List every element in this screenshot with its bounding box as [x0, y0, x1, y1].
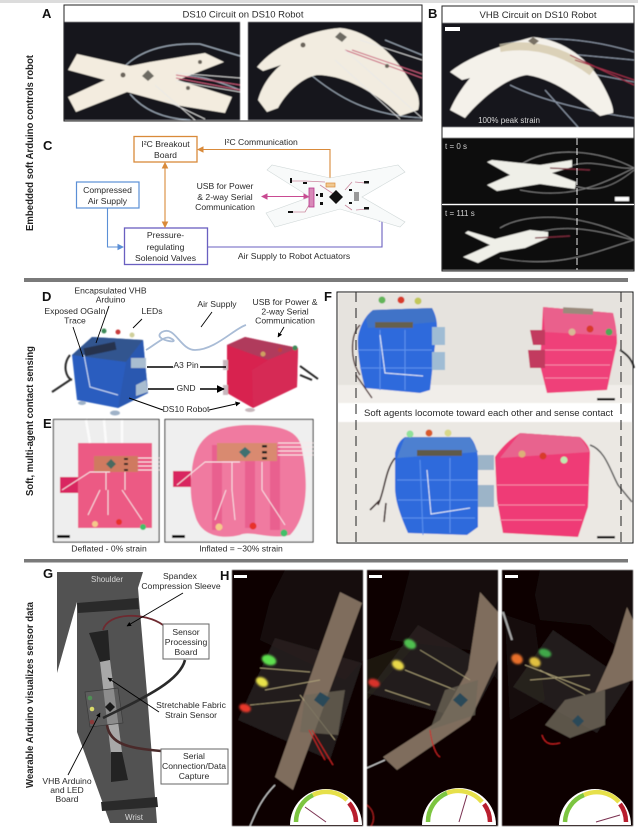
callout: strain sensor: Strain Sensor	[165, 710, 217, 720]
photo: flat robot	[64, 22, 240, 120]
red robot cube	[223, 337, 318, 412]
box: compressed air supply: Compressed	[83, 185, 132, 195]
box: pressure-regulating solenoid valves: regulating	[147, 242, 185, 252]
panel letter E: E	[43, 416, 52, 431]
arrow: air supply to robot actuators	[208, 216, 382, 247]
gauge 2	[422, 788, 496, 825]
callout: VHB Arduino	[42, 713, 100, 804]
air supply tube	[146, 325, 246, 350]
photo: t = 0 s	[442, 138, 634, 204]
callouts D: GND	[176, 383, 196, 393]
scale bar	[445, 27, 460, 31]
label: shoulder: Shoulder	[91, 575, 123, 584]
arrow: USB	[262, 196, 309, 198]
callouts D: Exposed OGaIn	[44, 306, 106, 316]
cables	[103, 616, 185, 751]
arrow: air supply to valves	[108, 208, 123, 247]
circuit diagram on robot outline	[266, 165, 405, 227]
box: serial connection: Connection/Data	[162, 761, 226, 771]
callouts D: USB for Power &	[253, 297, 318, 307]
box: sensor processing board: Board	[175, 647, 198, 657]
callouts D: A3 Pin	[173, 360, 199, 370]
box: pressure-regulating solenoid valves: Pressure-	[147, 230, 184, 240]
callouts D: Air Supply	[197, 299, 237, 309]
panel F: agents locomote and sense contact	[337, 292, 634, 543]
panel D: two soft robot cubes	[44, 286, 318, 416]
box: sensor processing board: Sensor	[172, 627, 200, 637]
panel letter A: A	[42, 6, 52, 21]
callout: VHB Arduino: VHB Arduino	[42, 776, 92, 786]
gauge 1	[290, 789, 362, 825]
box: pressure-regulating solenoid valves: Solenoid Valves	[135, 253, 196, 263]
callouts D: Encapsulated VHB	[74, 286, 147, 296]
shoulder band	[77, 598, 139, 613]
caption: 100% peak strain: 100% peak strain	[478, 116, 540, 125]
panel E: deflated and inflated agents	[54, 420, 313, 554]
photo: t = 111 s	[442, 205, 634, 270]
box: serial connection: Serial	[183, 751, 205, 761]
label: USB for power and serial	[195, 181, 255, 212]
callout: strain sensor: Stretchable Fabric	[156, 700, 227, 710]
box: compressed air supply: Air Supply	[88, 196, 128, 206]
label: air supply to robot actuators: Air Supply to Robot Actuators	[238, 251, 350, 261]
photo: agents in contact	[338, 422, 632, 542]
callout: spandex sleeve: Spandex	[163, 571, 198, 581]
label: USB for power and serial: USB for Power	[197, 181, 254, 191]
panel A: DS10 circuit on DS10 robot	[64, 5, 422, 121]
callout: spandex sleeve: Compression Sleeve	[141, 581, 221, 591]
time label t = 111 s: t = 111 s	[445, 209, 475, 218]
box: sensor processing board: Processing	[165, 637, 207, 647]
label: I2C communication: I²C Communication	[224, 137, 298, 147]
panel letter D: D	[42, 289, 51, 304]
VHB Arduino board	[85, 688, 123, 727]
panel C: system diagram	[76, 136, 405, 264]
caption: deflated: Deflated - 0% strain	[71, 544, 147, 554]
photo: bent robot	[248, 22, 422, 120]
photo: agents apart	[338, 293, 634, 403]
photo 3	[502, 570, 633, 826]
callouts D: DS10 Robot	[163, 404, 210, 414]
callout: VHB Arduino: Board	[56, 794, 79, 804]
photo: inflated	[165, 420, 313, 542]
panel letter B: B	[428, 6, 437, 21]
box: pressure-regulating solenoid valves	[124, 228, 208, 264]
box: serial connection: Capture	[179, 771, 210, 781]
callout: spandex sleeve	[127, 571, 221, 626]
panel letter C: C	[43, 138, 53, 153]
panel B: VHB circuit on DS10 robot	[442, 6, 634, 271]
callouts D: Arduino	[96, 294, 126, 304]
caption: locomote: Soft agents locomote toward each other and sense contact	[364, 408, 613, 418]
arrow: board to valves	[164, 163, 166, 227]
arrow: I2C communication	[198, 150, 330, 183]
section label: embedded soft Arduino controls robot: Embedded soft Arduino controls robot	[25, 54, 36, 231]
panel H: wearable photo sequence	[231, 569, 634, 826]
time label t = 0 s: t = 0 s	[445, 142, 467, 151]
callout: VHB Arduino: and LED	[50, 785, 84, 795]
section label: soft multi-agent contact sensing: Soft, multi-agent contact sensing	[25, 346, 36, 496]
callouts D	[44, 286, 318, 414]
box: I2C breakout board	[134, 136, 197, 162]
panel A heading: DS10 Circuit on DS10 Robot	[182, 8, 304, 20]
photo 1	[232, 570, 363, 826]
box: I2C breakout board: I²C Breakout	[141, 139, 190, 149]
strain sensor	[89, 630, 128, 782]
box: compressed air supply	[76, 182, 139, 208]
photo: 100% peak strain	[442, 23, 634, 127]
panel letter F: F	[324, 289, 332, 304]
panel letter G: G	[43, 566, 53, 581]
panel letter H: H	[220, 568, 229, 583]
wrist band	[101, 797, 158, 811]
photo 2	[367, 570, 498, 826]
panel B heading: VHB Circuit on DS10 Robot	[480, 9, 597, 20]
blue robot cube	[52, 328, 148, 416]
label: USB for power and serial: Communication	[195, 202, 255, 212]
callout: strain sensor	[108, 678, 227, 720]
box: serial connection	[161, 749, 228, 784]
caption: inflated: Inflated = ~30% strain	[199, 544, 283, 554]
box: sensor processing board	[163, 624, 209, 659]
section label: wearable Arduino visualizes sensor data: Wearable Arduino visualizes sensor data	[25, 602, 36, 788]
callouts D: LEDs	[141, 306, 163, 316]
label: USB for power and serial: & 2-way Serial	[197, 192, 253, 202]
callouts D: 2-way Serial	[261, 306, 309, 316]
photo: deflated	[54, 420, 159, 542]
callouts D: Communication	[255, 316, 315, 326]
box: I2C breakout board: Board	[154, 150, 177, 160]
gauge 3	[559, 789, 631, 825]
label: wrist: Wrist	[125, 813, 144, 822]
panel G: wearable arm diagram	[42, 571, 228, 823]
callouts D: Trace	[64, 316, 86, 326]
arm silhouette	[57, 572, 157, 823]
